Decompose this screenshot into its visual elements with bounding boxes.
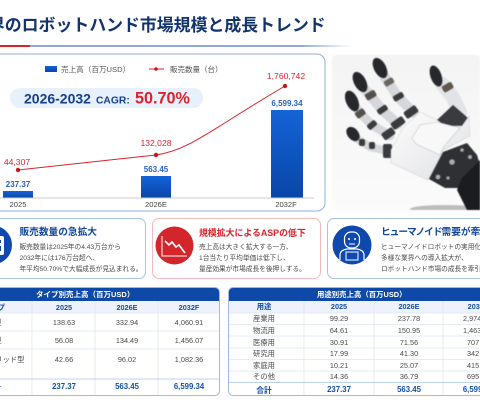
table: sales by type: 1,082.36 (175, 355, 203, 364)
table: sales by application: その他 (253, 372, 275, 381)
palm (391, 112, 470, 180)
table header (229, 288, 480, 301)
table: sales by application (228, 287, 480, 396)
CAGR pill: CAGR: (96, 96, 130, 106)
bar values: 6,599.34 (271, 99, 303, 108)
table: sales by type: 96.02 (118, 355, 136, 364)
table: sales by type: 134.49 (116, 336, 138, 345)
finger tips (342, 55, 445, 144)
table: sales by application: 2025 (331, 302, 347, 311)
axis (0, 197, 314, 199)
table: sales by type: 2032F (179, 303, 199, 312)
icon: falling chart (156, 226, 194, 264)
card text: 売上高は大きく拡大する一方、 (199, 244, 293, 250)
card text: 量産効果が市場成長を後押しする。 (199, 266, 306, 273)
table: sales by application: 17.99 (330, 349, 348, 358)
table: sales by type: 138.63 (53, 318, 75, 327)
column heading band (229, 301, 480, 313)
table: sales by application: 家庭用 (253, 361, 275, 370)
axis labels (10, 200, 297, 209)
card text: 年平均50.70%で大幅成長が見込まれる。 (20, 266, 142, 273)
line values (4, 71, 305, 167)
bar values: 563.45 (144, 165, 169, 174)
wrist mechanism (429, 143, 480, 188)
table: sales by application: 医療用 (253, 338, 275, 346)
axis labels: 2032F (275, 200, 297, 209)
table header (0, 288, 221, 301)
table: sales by application: 342 (467, 349, 479, 358)
card text: 1台当たり平均単価は低下し、 (199, 255, 290, 262)
table: sales by application: 41.30 (400, 349, 418, 358)
bar values (6, 99, 303, 189)
table: sales by application: 695 (467, 372, 479, 381)
icon: sales (0, 227, 12, 263)
table: sales by application: 237.37 (327, 385, 351, 394)
column heading band (0, 301, 221, 313)
finger links (354, 72, 460, 152)
table: sales by type: 6,599.34 (174, 382, 204, 390)
table: sales by type: 237.37 (52, 382, 76, 390)
table: sales by application: 用途 (257, 302, 271, 311)
table: sales by application: 415 (467, 361, 479, 370)
card text (381, 243, 480, 273)
table header: 用途別売上高（百万USD） (317, 290, 407, 299)
table rows (0, 303, 204, 392)
table: sales by application: 36.79 (400, 372, 418, 381)
CAGR pill: 50.70% (135, 90, 190, 108)
table: sales by application: 合計 (256, 386, 272, 395)
table: sales by type (0, 287, 220, 396)
table: sales by application: 64.61 (330, 326, 348, 335)
table rows (253, 302, 480, 395)
finger joints (354, 77, 468, 158)
table: sales by application: 30.91 (330, 338, 348, 346)
legend: 売上高（百万USD） (61, 64, 130, 74)
line values: 1,760,742 (267, 71, 305, 81)
card text: 多様な業界への導入拡大が、 (381, 255, 468, 262)
table: sales by application: 99.29 (330, 314, 348, 323)
card text (20, 243, 142, 273)
table: sales by application: 産業用 (253, 314, 275, 323)
CAGR pill: 2026-2032 (24, 90, 91, 106)
table: sales by application: 25.07 (400, 361, 418, 370)
table: sales by type: 42.66 (55, 355, 73, 364)
line values: 132,028 (140, 138, 172, 148)
table: sales by type: 2025 (56, 303, 72, 312)
bar values: 237.37 (6, 180, 31, 189)
forearm (457, 160, 480, 210)
table: sales by application: 研究用 (253, 349, 275, 358)
bars (3, 110, 303, 198)
grid lines (229, 301, 480, 395)
table: sales by application: 14.36 (330, 372, 348, 381)
CAGR pill (10, 88, 203, 108)
table: sales by application: 150.95 (398, 326, 420, 335)
card: sales volume growth (0, 218, 146, 279)
card text: 販売数量は2025年の4.43万台から (20, 244, 121, 250)
panel: market chart (0, 54, 326, 212)
table: sales by type: 1,456.07 (175, 336, 203, 345)
table: sales by application: 10.21 (330, 361, 348, 370)
table: sales by type: 4,060.91 (175, 318, 203, 327)
table: sales by type: 2026E (116, 303, 138, 312)
legend: 販売数量（台） (170, 64, 222, 74)
table: sales by type: 56.08 (55, 336, 73, 345)
legend (45, 64, 222, 74)
axis labels: 2025 (10, 200, 26, 209)
table: sales by application: 563.45 (397, 385, 421, 394)
table: sales by type: 332.94 (116, 318, 138, 327)
table: sales by type: 563.45 (115, 382, 139, 390)
table header: タイプ別売上高（百万USD） (36, 290, 134, 299)
illustration: robot hand (332, 56, 480, 211)
card text: 2032年には176万台超へ、 (20, 255, 99, 262)
table: sales by application: 237.78 (398, 314, 420, 323)
card: humanoid demand (327, 218, 480, 279)
line values: 44,307 (4, 157, 30, 167)
title underline (0, 45, 352, 46)
grid lines (0, 301, 219, 395)
card heading: 販売数量の急拡大 (20, 227, 97, 238)
sales line (16, 84, 287, 172)
table: sales by application: 71.56 (400, 338, 418, 346)
table: sales by application: 物流用 (253, 326, 275, 335)
card heading: 規模拡大によるASPの低下 (199, 228, 306, 238)
icon: humanoid robot (332, 226, 372, 264)
table: sales by application: 707 (467, 338, 479, 346)
table: sales by application: 2026E (398, 302, 420, 311)
card: ASP decline (152, 218, 321, 279)
card text (199, 243, 306, 273)
axis labels: 2026E (145, 200, 167, 209)
